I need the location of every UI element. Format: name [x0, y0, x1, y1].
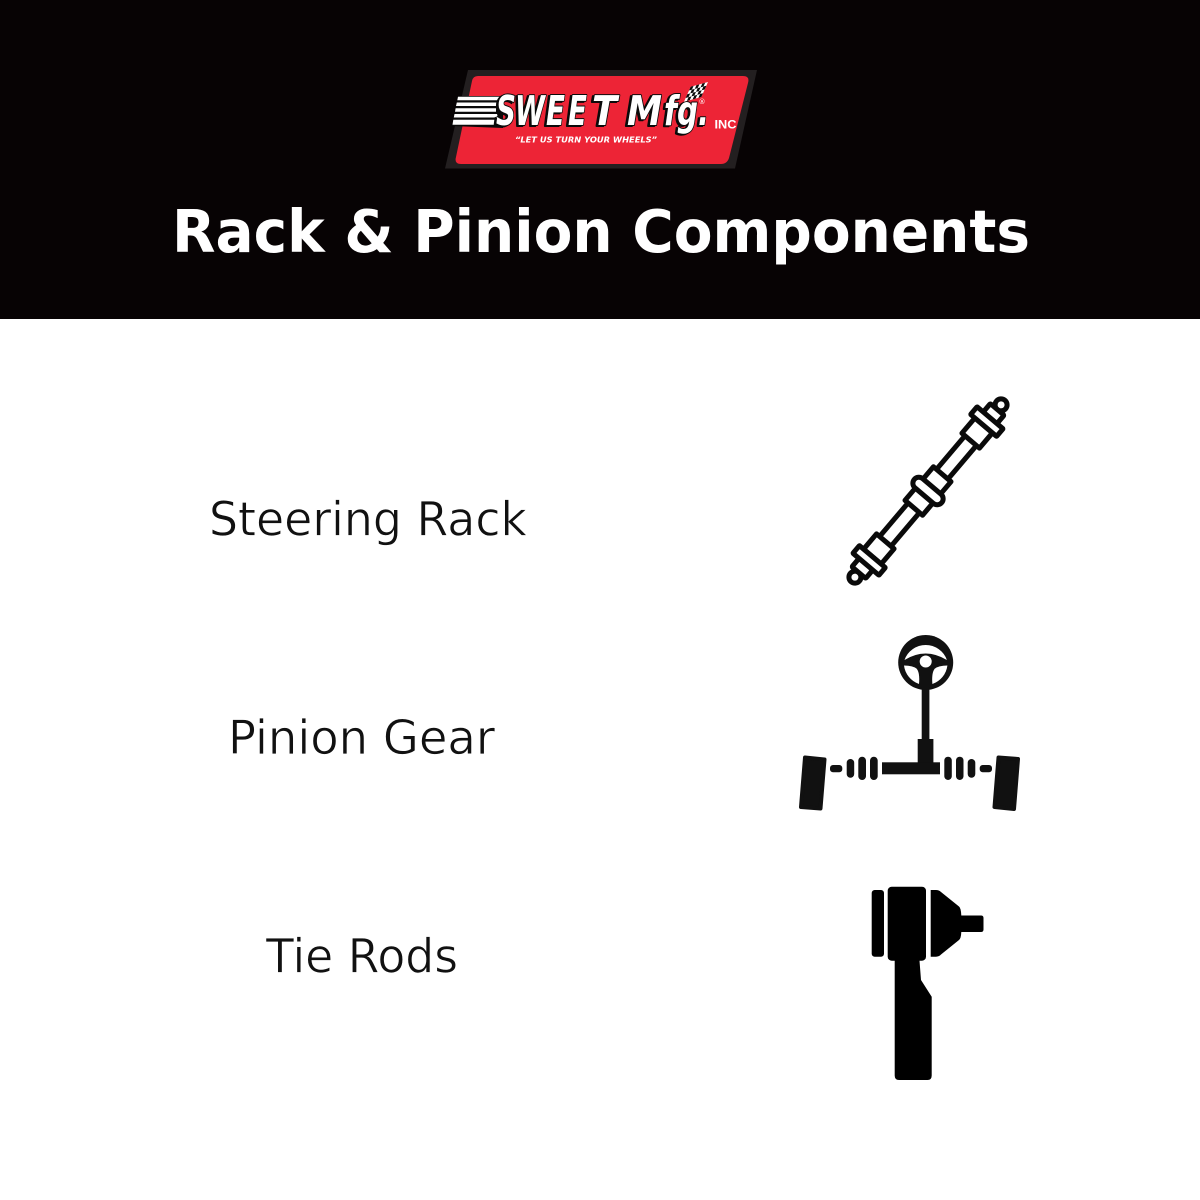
ball stud: [931, 890, 984, 957]
icon: steering system: [801, 635, 1018, 809]
steering wheel: [898, 635, 953, 690]
main housing: [888, 887, 926, 961]
logo wordmark: T: [592, 87, 620, 135]
label: Steering Rack: Steering Rack: [209, 492, 528, 548]
logo speed stripes: [452, 96, 506, 128]
logo tagline: “LET US TURN YOUR WHEELS”: [515, 136, 657, 144]
title: Rack & Pinion Components: [172, 197, 1030, 266]
logo wordmark: S: [496, 87, 516, 135]
shaft: [895, 958, 932, 1080]
left wheel: [801, 758, 824, 808]
logo checkered flag: [684, 82, 708, 102]
logo wordmark: E: [568, 87, 587, 135]
logo wordmark: M: [627, 87, 662, 135]
steering column: [922, 687, 929, 741]
left plate: [872, 890, 884, 957]
logo wordmark: .: [698, 87, 709, 135]
label: Pinion Gear: Pinion Gear: [228, 711, 496, 766]
logo wordmark: f: [664, 87, 681, 135]
logo INC: INC: [714, 118, 737, 132]
header band: [0, 0, 1200, 319]
icon: tie rod: [872, 887, 984, 1080]
logo wordmark: [496, 87, 709, 135]
logo wordmark: g: [677, 87, 698, 135]
rack bar: [882, 762, 940, 774]
logo registered mark: ®: [698, 98, 706, 106]
logo plate: [445, 70, 757, 168]
logo: Sweet Mfg: [445, 70, 757, 168]
label: Tie Rods: Tie Rods: [265, 930, 458, 984]
logo wordmark: W: [515, 87, 546, 135]
right wheel: [994, 758, 1018, 809]
logo wordmark: E: [546, 87, 565, 135]
icon: steering rack: [837, 389, 1019, 593]
left bellows: [830, 757, 878, 780]
logo red panel: [456, 76, 748, 164]
right bellows: [944, 757, 992, 780]
